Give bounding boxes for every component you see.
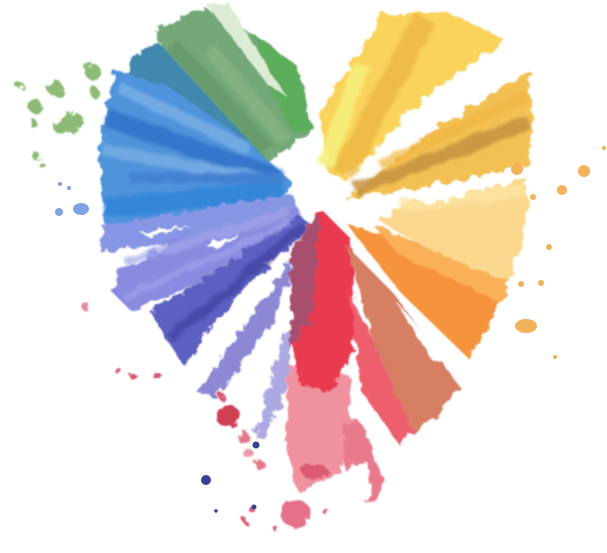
red and pink paint splatter <box>81 302 383 530</box>
gaps between brush strokes <box>140 62 525 360</box>
green paint splatter <box>15 64 101 168</box>
orange paint splatter <box>511 146 606 359</box>
yellow and gold brush strokes <box>320 12 533 282</box>
blue streaks <box>102 88 285 208</box>
green streaks <box>172 45 285 150</box>
purple streaks <box>125 212 305 338</box>
yellow streaks <box>325 18 528 205</box>
green brush strokes <box>155 3 312 162</box>
red and pink brush strokes <box>286 210 415 492</box>
teal and blue brush strokes <box>99 42 292 228</box>
periwinkle and purple brush strokes <box>100 194 312 437</box>
navy paint splatter <box>201 442 260 513</box>
blue paint splatter <box>55 182 89 216</box>
brown and orange brush strokes <box>345 222 510 430</box>
